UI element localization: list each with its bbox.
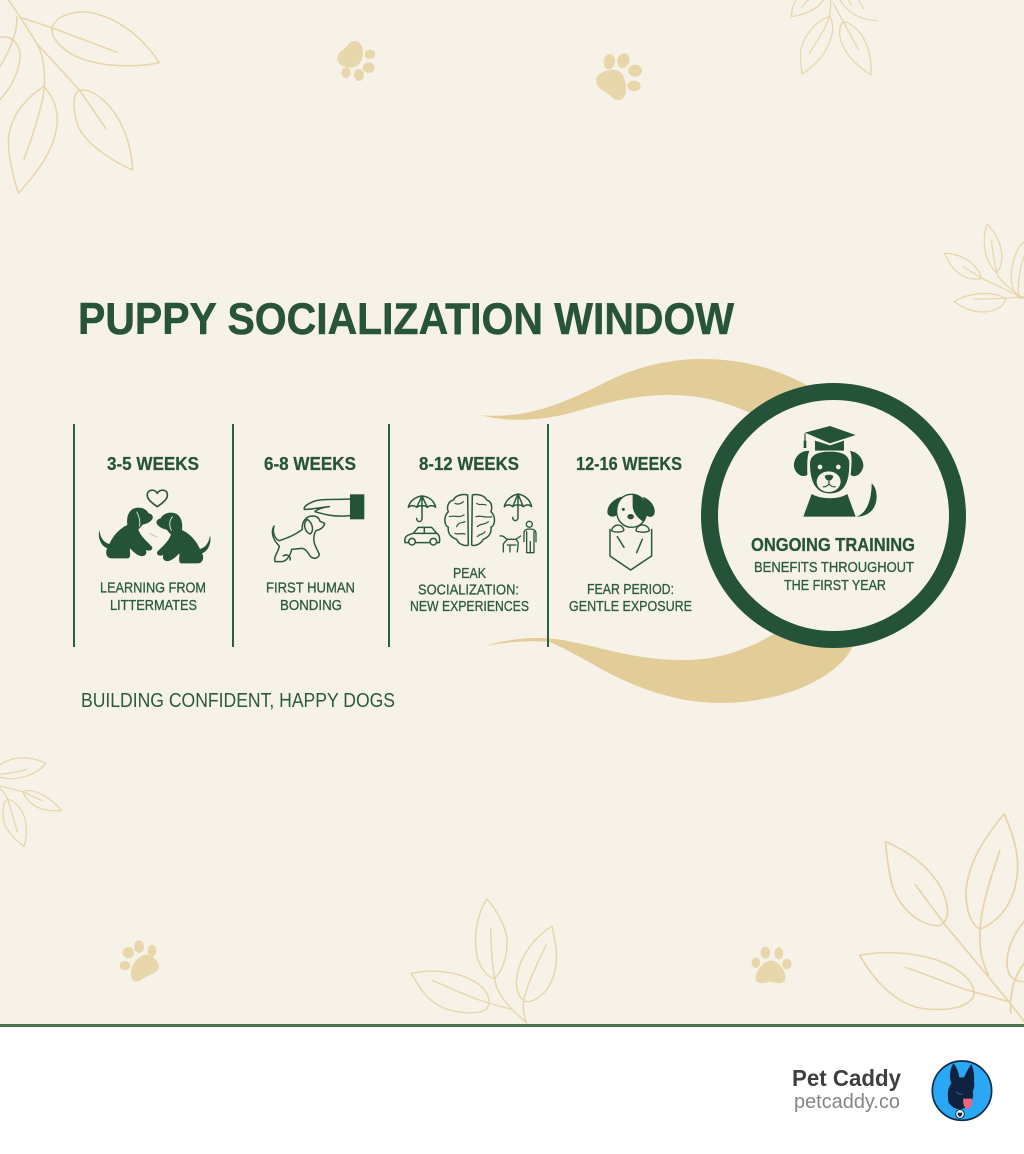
caption: peak socialization: SOCIALIZATION: [418, 582, 519, 598]
caption: first human bonding: FIRST HUMAN [266, 580, 355, 596]
footer background [0, 1024, 1024, 1154]
icon: paw print top-centre [596, 52, 642, 100]
divider lines [74, 424, 548, 647]
subtitle: BUILDING CONFIDENT, HAPPY DOGS [81, 690, 395, 712]
icon: paw print bottom-left [120, 940, 159, 982]
caption: learning from littermates [100, 580, 206, 614]
decoration: bottom-centre leaves [411, 899, 556, 1023]
icon: puppy in pocket [607, 494, 655, 570]
icon: paw print bottom-centre [751, 947, 792, 983]
icon: two puppies with heart [99, 490, 210, 563]
icon: paw print top-left [337, 41, 375, 81]
text: benefits: BENEFITS THROUGHOUT [754, 559, 914, 576]
brand name: Pet Caddy [792, 1065, 901, 1091]
icon: umbrellas, car, brain, dog and person [405, 494, 536, 553]
heading: 8-12 weeks: 8-12 WEEKS [419, 453, 519, 474]
caption: peak socialization [410, 565, 529, 615]
panel: 6-8 weeks [264, 453, 364, 614]
icon: dog logo [932, 1061, 992, 1120]
caption: first human bonding: BONDING [280, 597, 342, 614]
heading: ongoing training: ONGOING TRAINING [751, 535, 915, 555]
heading: 3-5 weeks: 3-5 WEEKS [107, 453, 199, 474]
caption: fear period: FEAR PERIOD: [587, 581, 674, 598]
swoosh: top [480, 359, 810, 425]
text: benefits [754, 559, 914, 594]
caption: first human bonding [266, 580, 355, 614]
title: PUPPY SOCIALIZATION WINDOW [78, 295, 734, 344]
swoosh: bottom [485, 620, 870, 703]
heading: 6-8 weeks: 6-8 WEEKS [264, 453, 356, 474]
panel: 8-12 weeks [405, 453, 536, 615]
decoration: top-left leaves [0, 0, 159, 193]
icon: hand petting puppy [272, 494, 364, 562]
caption: learning from littermates: LITTERMATES [110, 597, 197, 614]
decoration: top-right leaves [792, 0, 877, 75]
caption: fear period: GENTLE EXPOSURE [569, 598, 692, 615]
panel: ongoing training circle [710, 392, 958, 640]
caption: learning from littermates: LEARNING FROM [100, 580, 206, 596]
decoration: bottom-right leaves [860, 814, 1024, 1023]
decoration: left-edge leaves [0, 758, 62, 847]
heading: 12-16 weeks: 12-16 WEEKS [576, 453, 682, 474]
panel: 12-16 weeks [569, 453, 692, 615]
panel: 3-5 weeks [99, 453, 210, 614]
footer top border [0, 1024, 1024, 1027]
caption: peak socialization: PEAK [453, 565, 486, 582]
caption: fear period [569, 581, 692, 615]
ring [710, 392, 958, 640]
footer [0, 1024, 1024, 1154]
brand url: petcaddy.co [794, 1091, 900, 1113]
text: benefits: THE FIRST YEAR [784, 577, 886, 594]
caption: peak socialization: NEW EXPERIENCES [410, 598, 529, 615]
icon: puppy with graduation cap [794, 426, 877, 517]
decoration: right-edge leaves [945, 224, 1024, 312]
